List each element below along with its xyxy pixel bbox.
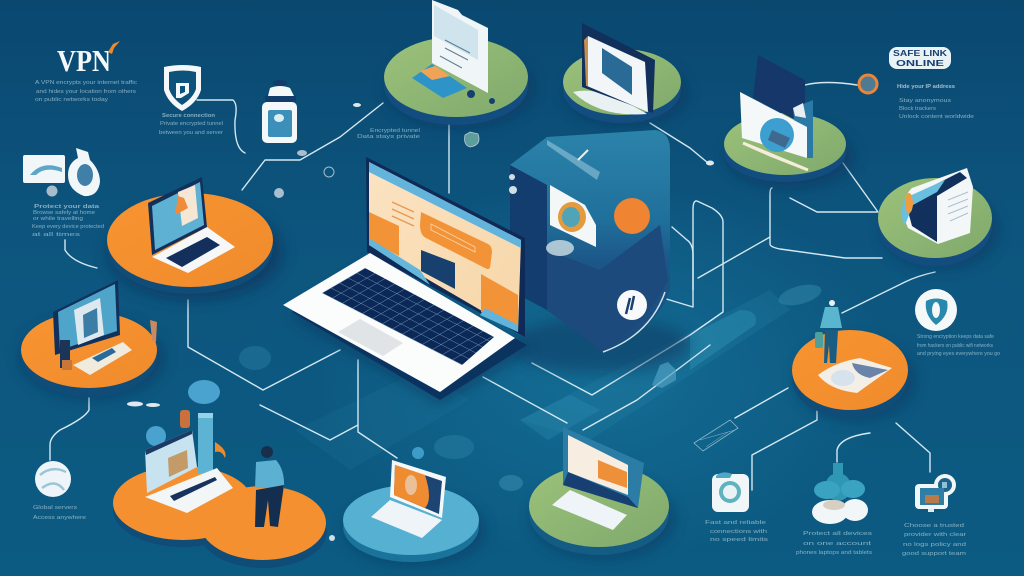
icon: small laptop [148, 177, 235, 273]
icon: blue laptop [371, 447, 446, 538]
text block: cluster: phones laptops and tablets [796, 550, 872, 556]
icon: green laptop [552, 427, 644, 530]
decorative nodes [127, 103, 738, 541]
text block: upper right: Stay anonymous [899, 98, 951, 104]
text block: left: at all times [32, 232, 80, 238]
text block: globe [33, 505, 86, 521]
text block: badge: connections with [710, 529, 767, 535]
text block: badge: no speed limits [710, 537, 768, 543]
icon: white circle badge [617, 290, 647, 320]
text block: central caption: Data stays private [357, 134, 420, 140]
platform: right orange [792, 300, 915, 420]
text block: intro [35, 80, 137, 103]
text block: lock card [902, 523, 967, 557]
text block: shield circle: and prying eyes everywhere you go [917, 351, 1000, 357]
platform: top green 1 [384, 0, 534, 128]
text block: lock card: good support team [902, 551, 967, 557]
icon: globe [35, 461, 71, 497]
text block: cluster: on one account [803, 541, 872, 547]
icon: standing person [255, 446, 284, 527]
platform: bottom green [529, 427, 675, 558]
icon: lock card [915, 474, 956, 512]
text block: globe: Global servers [33, 505, 77, 511]
text block: lock card: Choose a trusted [904, 523, 964, 529]
icon: shield circle [915, 289, 957, 331]
text block: upper right [897, 84, 974, 120]
text block: upper right: Unlock content worldwide [899, 114, 974, 120]
text block: left: or while travelling [33, 216, 83, 222]
platform: bottom-left orange two-lobe [113, 410, 327, 568]
text block: badge [705, 520, 768, 543]
icon: orange button [614, 198, 650, 234]
icon: document panel [902, 168, 973, 244]
text block: shield circle: Strong encryption keeps data safe [917, 334, 994, 340]
icon: orange ring [859, 75, 877, 93]
text block: left [32, 204, 104, 238]
icon: white badge [712, 472, 749, 512]
icon: card and document [412, 0, 495, 104]
icon: teal person [815, 300, 842, 363]
platform: top-left orange [107, 177, 283, 300]
text block: central caption [357, 128, 420, 140]
text block: badge: Fast and reliable [705, 520, 766, 526]
text block: shield: Private encrypted tunnel [160, 121, 223, 127]
callout pill: upper right: SAFE LINK [893, 49, 947, 58]
trackpad [338, 319, 403, 356]
text block: intro: A VPN encrypts your internet traffic [35, 80, 137, 86]
laptop screen [369, 162, 521, 332]
central laptop [283, 157, 530, 404]
icon: tablet [573, 23, 655, 115]
text block: lock card: no logs policy and [903, 542, 966, 548]
icon: screen badge [550, 185, 596, 247]
text block: shield circle: from hackers on public wifi networks [917, 343, 993, 349]
laptop base [283, 253, 515, 392]
icon: desktop monitor [53, 280, 157, 375]
text block: lock card: provider with clear [904, 532, 966, 538]
keyboard [322, 268, 494, 365]
callout pill: upper right [889, 47, 951, 69]
text block: upper right: Block trackers [899, 106, 936, 112]
platform: right green lower [878, 168, 998, 268]
icon: folder with badge [740, 55, 813, 170]
platform: left orange with monitor [20, 280, 164, 398]
text block: left: Browse safely at home [33, 210, 95, 216]
text block: intro: and hides your location from others [36, 89, 136, 95]
icon: computer and tower [145, 410, 233, 513]
text block: left: Keep every device protected [32, 224, 104, 230]
text block: upper right: Hide your IP address [897, 84, 955, 90]
icon: device on platform [818, 358, 892, 393]
platform: right green upper [724, 55, 854, 188]
icon: blue circle [146, 426, 166, 446]
text block: shield circle [917, 334, 1000, 357]
icon: teal and white cluster [812, 463, 868, 524]
callout pill: upper right: ONLINE [896, 59, 945, 68]
text block: globe: Access anywhere [33, 515, 86, 521]
platform: top green 2 [563, 23, 687, 125]
text block: shield: between you and server [159, 130, 223, 136]
text block: shield [159, 113, 223, 136]
text block: shield: Secure connection [162, 113, 216, 119]
text block: left: Protect your data [34, 204, 100, 210]
icon: shield [164, 65, 201, 111]
connector lines [50, 82, 935, 490]
text block: cluster: Protect all devices [803, 531, 872, 537]
platform: bottom blue [343, 447, 485, 564]
text block: intro: on public networks today [35, 97, 108, 103]
icon: jar [262, 80, 297, 143]
text block: cluster [796, 531, 872, 556]
text block: central caption: Encrypted tunnel [370, 128, 420, 134]
title: VPN: VPN [57, 43, 111, 78]
icon: card and bottle [23, 148, 100, 196]
central server tower [509, 130, 690, 373]
